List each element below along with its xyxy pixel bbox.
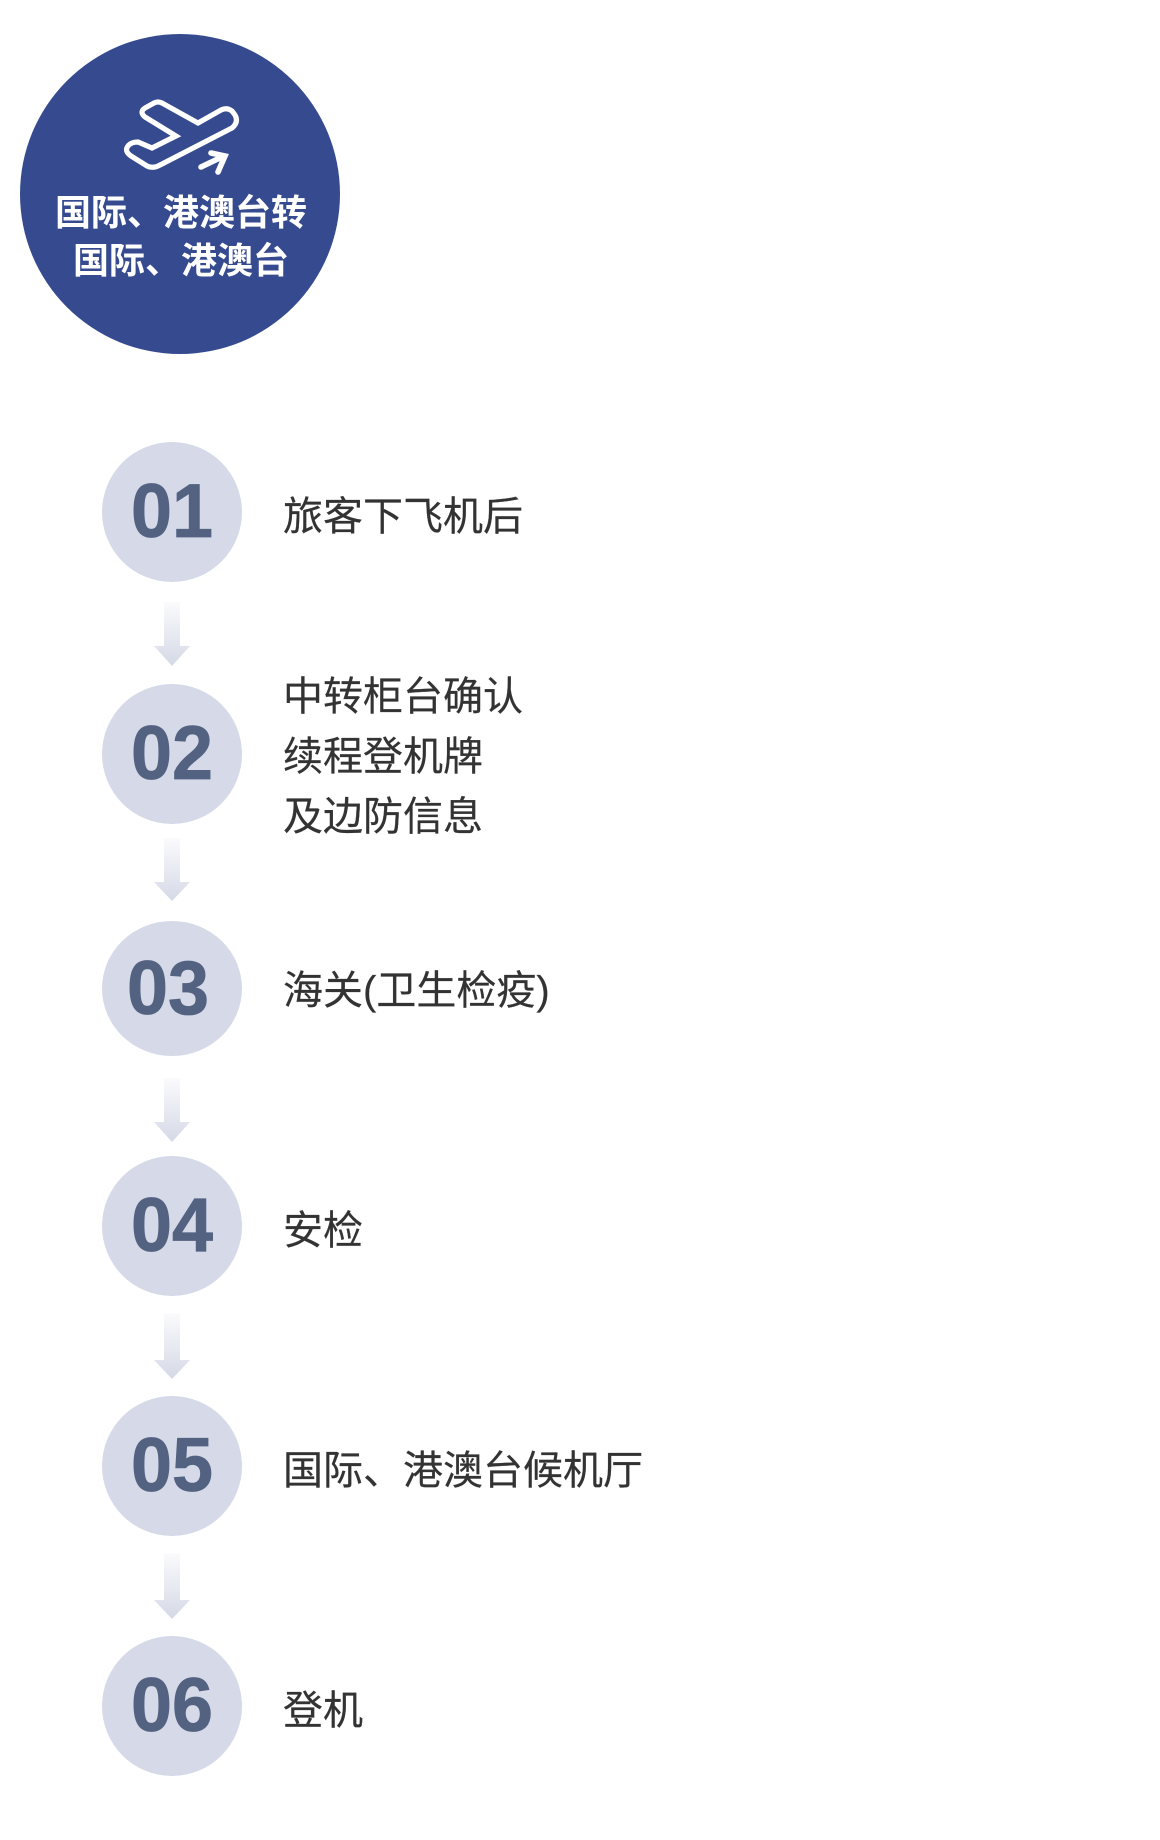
number circle 02: 02 — [131, 711, 213, 796]
icon: airplane departing — [124, 99, 240, 175]
step text 01: 旅客下飞机后 — [283, 495, 523, 539]
number circle 03: 03 — [127, 946, 209, 1031]
number circle 04 — [102, 1156, 242, 1296]
arrow 2 — [154, 845, 190, 901]
header badge — [20, 34, 340, 354]
arrow 1 — [154, 609, 190, 666]
arrow 3 — [154, 1085, 190, 1142]
arrow 4 — [154, 1320, 190, 1379]
step 02 — [102, 675, 523, 839]
number circle 03 — [102, 921, 242, 1056]
heading line 2: 国际、港澳台 — [73, 240, 289, 281]
step 05 — [102, 1396, 643, 1536]
heading line 1: 国际、港澳台转 — [55, 192, 307, 233]
number circle 01: 01 — [131, 469, 213, 554]
number circle 02 — [102, 684, 242, 824]
step text 02 — [283, 675, 523, 839]
arrow 5 — [154, 1560, 190, 1619]
step text 06: 登机 — [283, 1689, 363, 1733]
number circle 05: 05 — [131, 1423, 213, 1508]
number circle 06 — [102, 1636, 242, 1776]
step text 02: 续程登机牌 — [283, 735, 483, 779]
step text 02: 及边防信息 — [283, 795, 483, 839]
step 04 — [102, 1156, 363, 1296]
step text 03: 海关(卫生检疫) — [283, 969, 550, 1013]
step 03 — [102, 921, 550, 1056]
number circle 04: 04 — [131, 1183, 213, 1268]
step text 04: 安检 — [283, 1209, 363, 1253]
step text 02: 中转柜台确认 — [283, 675, 523, 719]
step 06 — [102, 1636, 363, 1776]
step text 05: 国际、港澳台候机厅 — [283, 1449, 643, 1493]
number circle 06: 06 — [131, 1663, 213, 1748]
number circle 01 — [102, 442, 242, 582]
number circle 05 — [102, 1396, 242, 1536]
step 01 — [102, 442, 523, 582]
